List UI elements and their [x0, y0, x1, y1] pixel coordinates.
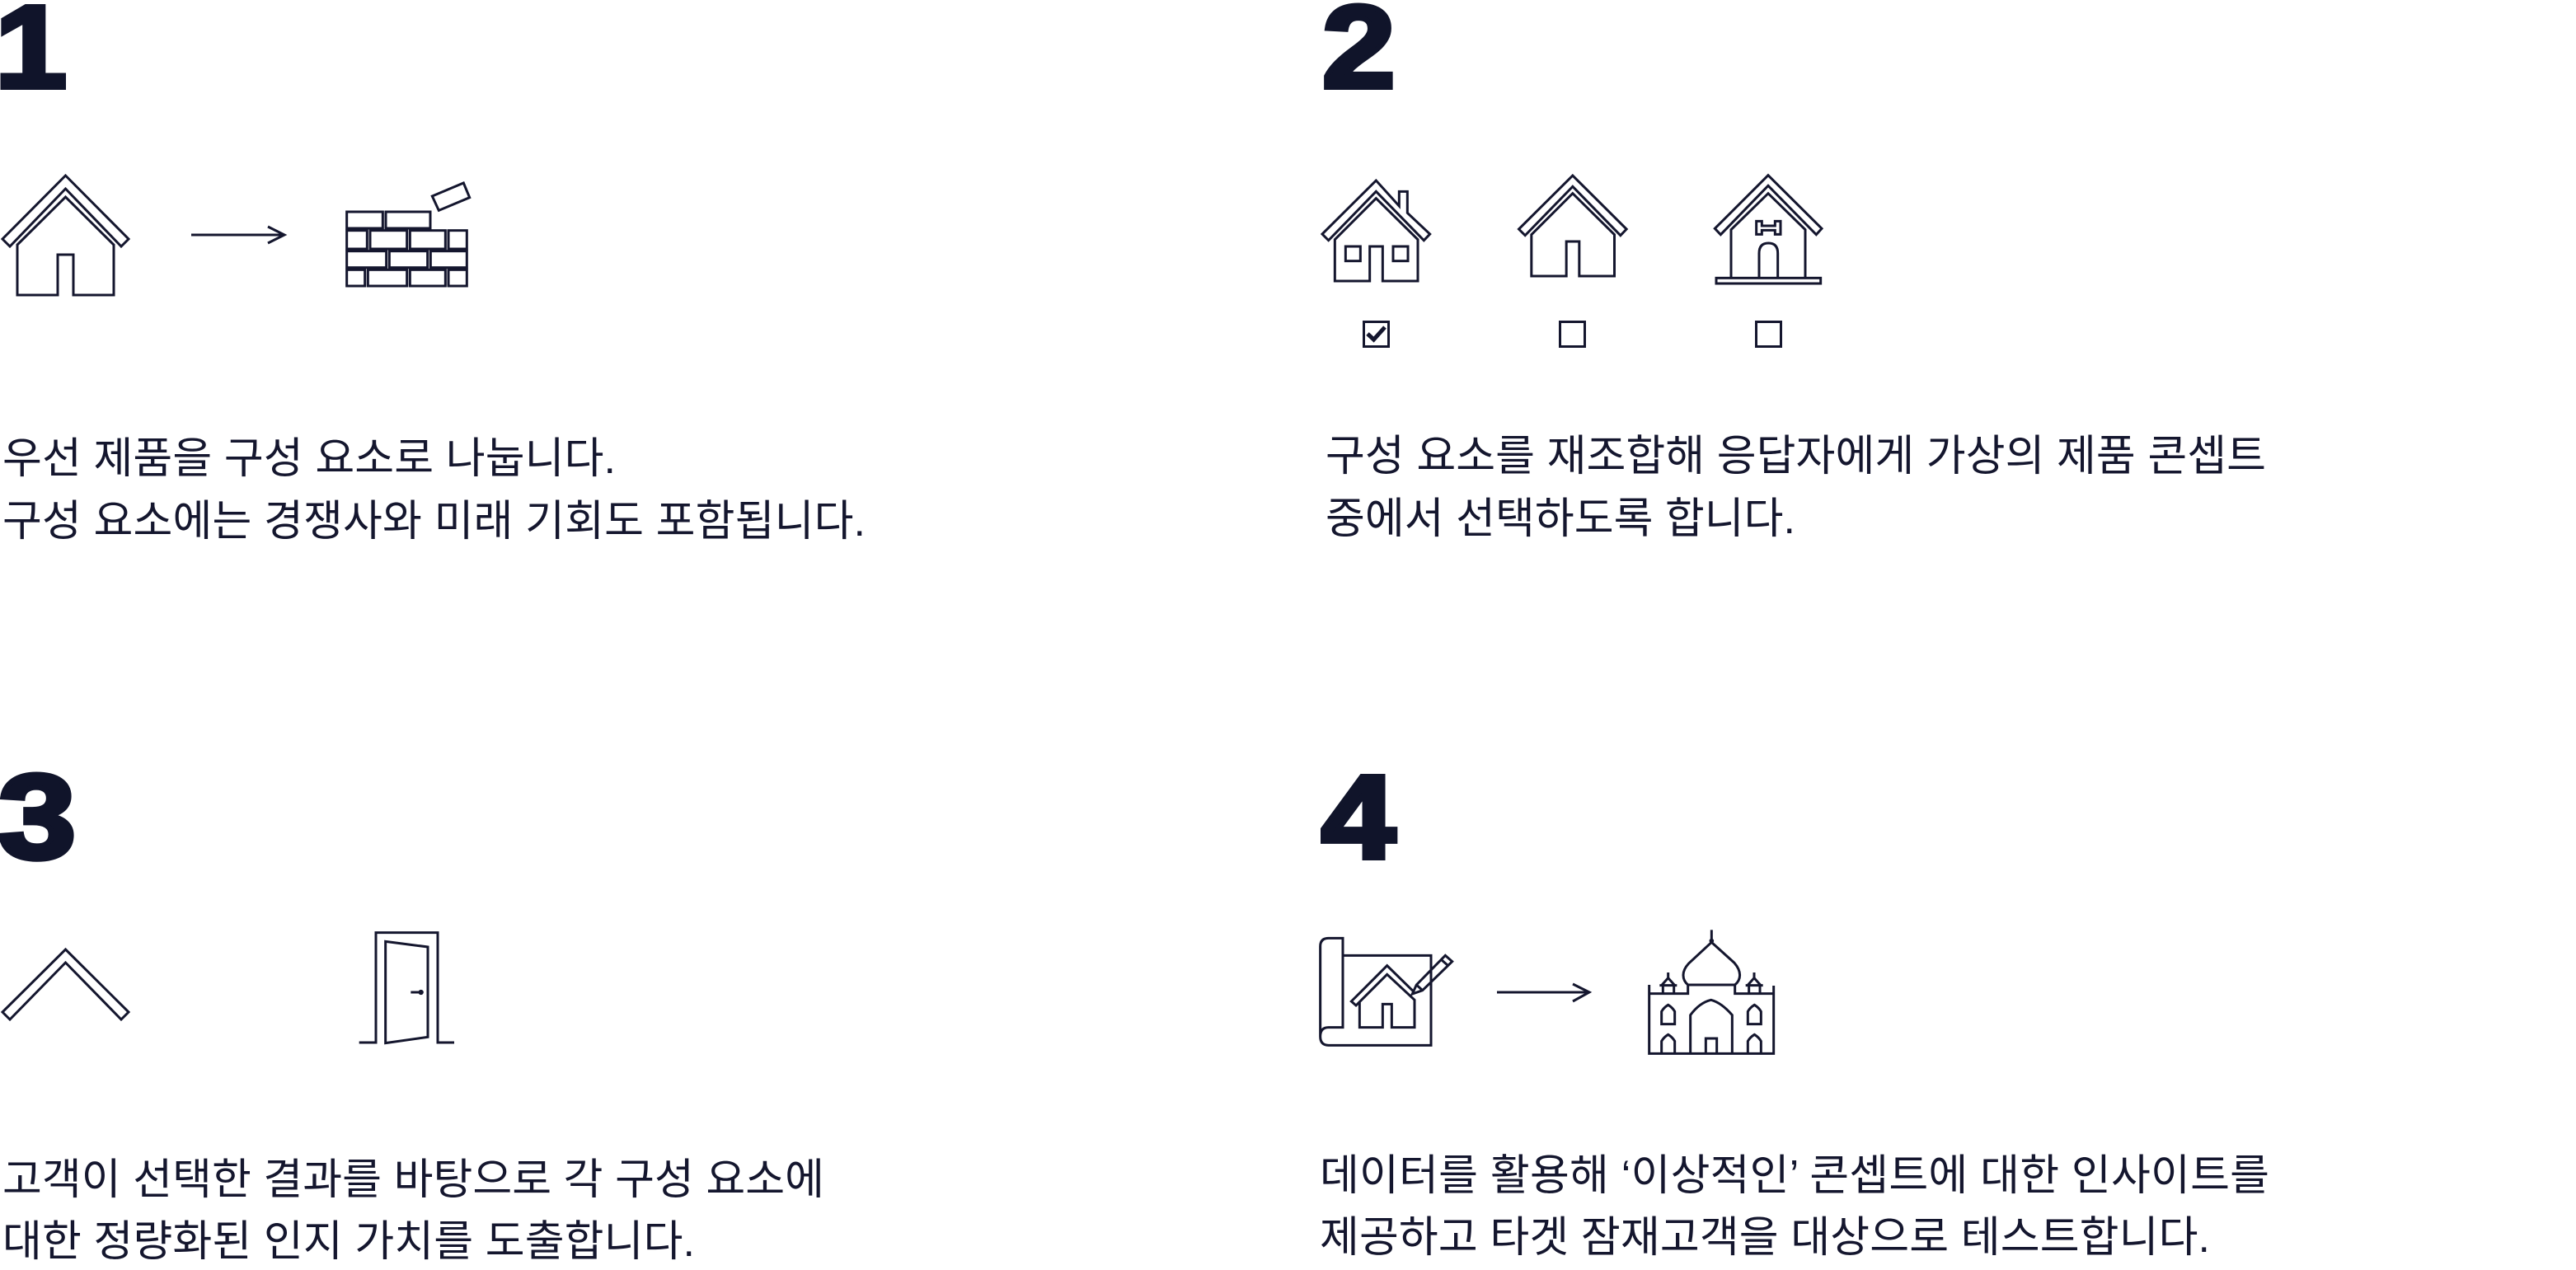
icon: blueprint with house and pencil — [1321, 938, 1452, 1045]
heading: number 3: 3 — [0, 750, 76, 883]
panel: step 1 — [0, 0, 866, 546]
icon: plain house — [1518, 176, 1626, 276]
icon: open door — [359, 933, 454, 1043]
icon: house with plinth — [1715, 176, 1822, 284]
panel: step 3 — [0, 750, 824, 1266]
panel: step 2 — [1322, 0, 2266, 543]
text: step 3 description: 고객이 선택한 결과를 바탕으로 각 구성 요소에 — [2, 1156, 824, 1204]
panel: step 4 — [1320, 752, 2269, 1262]
icon: brick wall — [347, 183, 470, 286]
text: step 3 description — [2, 1156, 824, 1266]
icon: checked checkbox — [1363, 321, 1388, 346]
heading: number 4: 4 — [1321, 752, 1396, 883]
text: step 4 description: 데이터를 활용해 ‘이상적인’ 콘셉트에 대한 인사이트를 — [1320, 1152, 2269, 1200]
text: step 4 description: 제공하고 타겟 잠재고객을 대상으로 테스트합니다. — [1320, 1214, 2210, 1262]
icon: house with chimney and windows — [1322, 180, 1430, 281]
arrow — [191, 227, 284, 243]
icon: house — [2, 176, 129, 295]
text: step 1 description: 구성 요소에는 경쟁사와 미래 기회도 포함됩니다. — [2, 498, 866, 546]
text: step 2 description: 중에서 선택하도록 합니다. — [1326, 495, 1795, 543]
text: step 2 description — [1326, 433, 2266, 543]
text: step 1 description: 우선 제품을 구성 요소로 나눕니다. — [2, 435, 616, 483]
icon: empty checkbox — [1756, 321, 1781, 346]
icon: domed palace — [1649, 930, 1774, 1053]
text: step 4 description — [1320, 1152, 2269, 1262]
icon: roof — [2, 949, 129, 1019]
icon: empty checkbox — [1560, 321, 1584, 346]
arrow — [1497, 984, 1589, 1001]
text: step 2 description: 구성 요소를 재조합해 응답자에게 가상의 제품 콘셉트 — [1326, 433, 2266, 480]
text: step 3 description: 대한 정량화된 인지 가치를 도출합니다. — [2, 1218, 695, 1266]
text: step 1 description — [2, 435, 866, 546]
